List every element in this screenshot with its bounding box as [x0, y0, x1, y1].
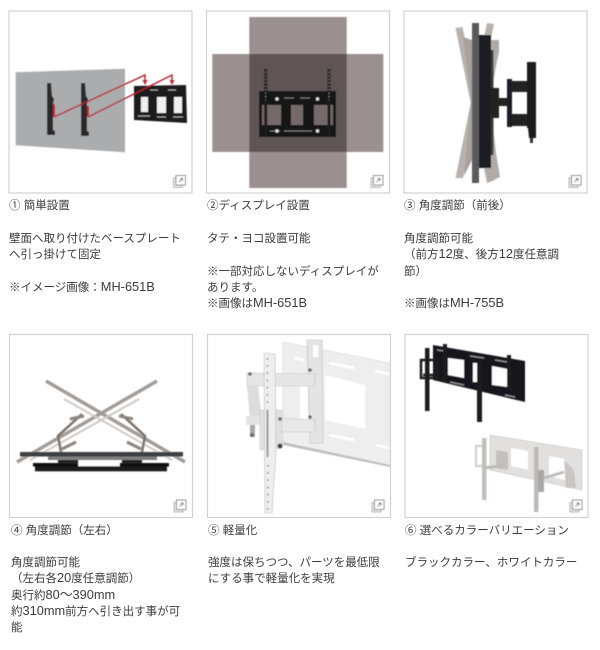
panel: easy installation [9, 11, 192, 193]
caption: feature 6: ⑥ 選べるカラーバリエーション [405, 524, 569, 537]
caption: feature 4: 約310mm前方へ引き出す事が可 [11, 603, 180, 618]
panel: display installation [206, 11, 390, 193]
image: black mount [421, 344, 525, 422]
caption: feature 1: へ引っ掛けて固定 [9, 247, 101, 261]
caption: feature 4: （左右各20度任意調節） [11, 570, 140, 585]
caption: feature 1: 壁面へ取り付けたベースプレート [9, 232, 181, 245]
icon: enlarge [174, 500, 186, 512]
image: side view of tilting mount [456, 23, 536, 183]
caption: feature 1: ※イメージ画像：MH-651B [9, 279, 155, 294]
panel: swivel adjustment [10, 334, 192, 518]
caption: feature 2: あります。 [207, 281, 263, 294]
caption: feature 4: 角度調節可能 [11, 555, 80, 569]
caption: feature 3: ③ 角度調節（前後） [404, 198, 511, 212]
caption: feature 6: ブラックカラー、ホワイトカラー [405, 555, 577, 569]
caption: feature 3: 節） [404, 264, 427, 278]
caption: feature 4: 奥行約80〜390mm [11, 587, 115, 602]
caption: feature 2: ※一部対応しないディスプレイが [207, 264, 379, 278]
panel: colour variation [405, 334, 588, 518]
caption: feature 1 [9, 198, 181, 294]
panel: lightweight [208, 334, 390, 518]
caption: feature 4: ④ 角度調節（左右） [11, 523, 118, 537]
panel: tilt adjustment [404, 11, 587, 193]
caption: feature 5 [208, 524, 380, 585]
icon: enlarge [372, 500, 384, 512]
image: white mount [476, 435, 582, 512]
caption: feature 5: 強度は保ちつつ、パーツを最低限 [208, 555, 380, 569]
image: wall plate hooking onto base plate [16, 69, 187, 152]
caption: feature 5: にする事で軽量化を実現 [208, 572, 335, 585]
icon: enlarge [174, 176, 186, 188]
image: portrait and landscape display overlap [212, 17, 383, 188]
caption: feature 3: （前方12度、後方12度任意調 [404, 246, 559, 261]
image: white mount close-up [246, 340, 390, 513]
caption: feature 6 [405, 524, 577, 569]
caption: feature 3: ※画像はMH-755B [404, 295, 504, 310]
caption: feature 3 [404, 198, 559, 310]
icon: enlarge [569, 176, 581, 188]
caption: feature 4 [11, 523, 180, 634]
image: top view of swivelling mount [17, 381, 185, 471]
caption: feature 2: タテ・ヨコ設置可能 [207, 231, 311, 245]
caption: feature 3: 角度調節可能 [404, 231, 473, 245]
caption: feature 1: ① 簡単設置 [9, 198, 70, 212]
icon: enlarge [371, 176, 383, 188]
icon: enlarge [570, 500, 582, 512]
caption: feature 5: ⑤ 軽量化 [208, 524, 258, 537]
caption: feature 4: 能 [11, 620, 23, 634]
caption: feature 2 [207, 198, 379, 310]
caption: feature 2: ②ディスプレイ設置 [207, 198, 310, 212]
caption: feature 2: ※画像はMH-651B [207, 295, 307, 310]
